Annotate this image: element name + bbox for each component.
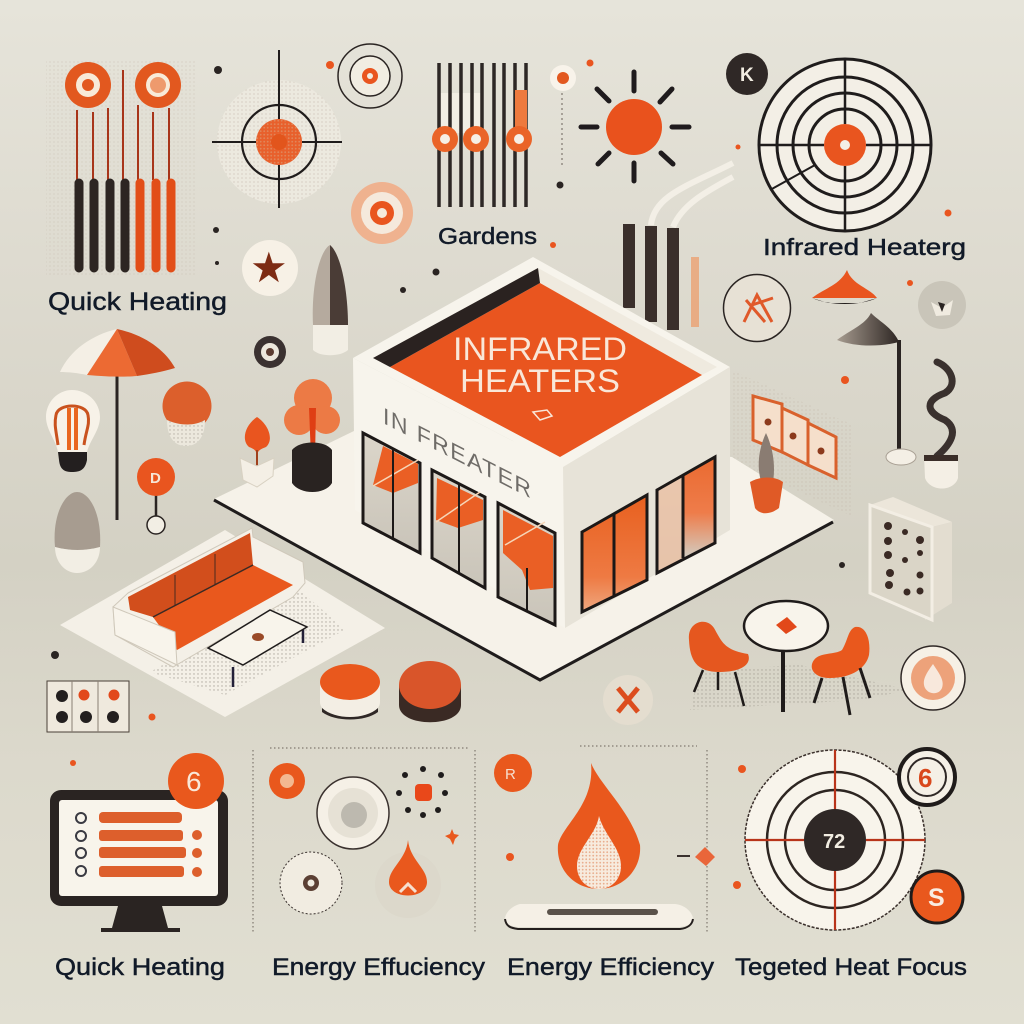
icon: small diamond pointer	[677, 847, 715, 866]
icon: star badge	[242, 240, 298, 296]
icon: six badge: 6	[918, 763, 932, 793]
panel: central building	[353, 257, 730, 628]
number badge 6	[168, 753, 224, 809]
icon: flame	[558, 763, 640, 889]
icon: bottom target	[745, 750, 925, 930]
icon: bottom target: 72	[823, 831, 845, 853]
icon: chimney pipes	[629, 163, 733, 330]
icon: gauge panel	[269, 763, 459, 918]
roof label: INFRARED	[453, 331, 627, 367]
wall label: IN FREATER	[383, 403, 531, 504]
panel: white floor platform	[214, 430, 834, 680]
heading: Tegeted Heat Focus: Tegeted Heat Focus	[735, 954, 967, 981]
icon: A monogram badge	[724, 274, 790, 342]
icon: sofa	[113, 528, 305, 667]
heading: Energy Efficiency: Energy Efficiency	[507, 954, 714, 981]
icon: patio plant pot	[750, 433, 783, 513]
icon: bollard lamp	[313, 245, 348, 355]
heading: Infrared Heaterg: Infrared Heaterg	[763, 234, 966, 260]
panel: stippled wall behind patio	[732, 370, 853, 517]
icon: gardens slider rods	[432, 63, 532, 207]
roof label: HEATERS	[460, 363, 620, 399]
icon: coffee table	[208, 610, 307, 687]
decorative orange specks	[70, 60, 952, 889]
icon: K badge	[726, 53, 768, 95]
icon: concentric ring	[338, 44, 402, 108]
window right 1	[582, 495, 647, 612]
panel: bottom monitor	[50, 753, 228, 932]
heading: Quick Heating top: Quick Heating	[48, 288, 227, 316]
icon: mushroom lamp	[162, 382, 212, 446]
icon: flame badge	[901, 646, 965, 710]
icon: D badge with pole: D	[150, 470, 161, 487]
icon: light bulb	[46, 390, 100, 472]
icon: ring button	[254, 336, 286, 368]
window left 1	[363, 433, 420, 553]
icon: small X badge	[603, 675, 653, 725]
icon: K badge: K	[740, 65, 754, 86]
window left 3	[498, 503, 555, 625]
icon: D badge with pole	[137, 458, 175, 534]
heading: Gardens: Gardens	[438, 223, 537, 249]
decorative dark specks	[51, 66, 845, 659]
icon: grey badge	[918, 281, 966, 329]
dotted panel dividers	[253, 746, 707, 933]
icon: S badge: S	[928, 884, 945, 912]
icon: flame base plate	[505, 904, 693, 929]
icon: egg stone planter	[55, 492, 100, 573]
icon: wall heater panel	[753, 396, 836, 478]
window right 2	[657, 457, 715, 573]
icon: glowing target	[351, 182, 413, 244]
small roof icon	[533, 410, 552, 420]
heading: Quick Heating bottom: Quick Heating	[55, 954, 225, 981]
icon: crosshair target	[212, 50, 342, 208]
icon: control box	[870, 497, 952, 620]
roof label	[453, 331, 627, 399]
icon: floor lamp	[837, 313, 916, 465]
icon: star badge: ★	[250, 244, 288, 291]
icon: S badge	[911, 871, 963, 923]
icon: potted tree	[284, 379, 340, 492]
panel: top left heating rods	[46, 60, 196, 275]
icon: sun	[581, 72, 689, 181]
heading: Energy Effuciency: Energy Effuciency	[272, 954, 485, 981]
icon: infrared radar target	[759, 58, 931, 231]
icon: hanging lamp	[812, 270, 877, 304]
icon: dot control strip	[47, 681, 129, 732]
number badge 6: 6	[186, 766, 202, 797]
icon: round stools	[320, 661, 461, 722]
icon: small plant	[240, 417, 274, 487]
icon: R badge: R	[505, 766, 516, 783]
icon: heat wave planter	[924, 362, 958, 488]
icon: parasol	[60, 329, 175, 520]
icon: six badge	[899, 749, 955, 805]
icon: cafe table and chairs	[689, 601, 910, 715]
window left 2	[432, 470, 485, 588]
icon: R badge	[494, 754, 532, 792]
icon: small orange pin badge	[550, 65, 576, 165]
panel: lounge rug	[60, 530, 385, 717]
